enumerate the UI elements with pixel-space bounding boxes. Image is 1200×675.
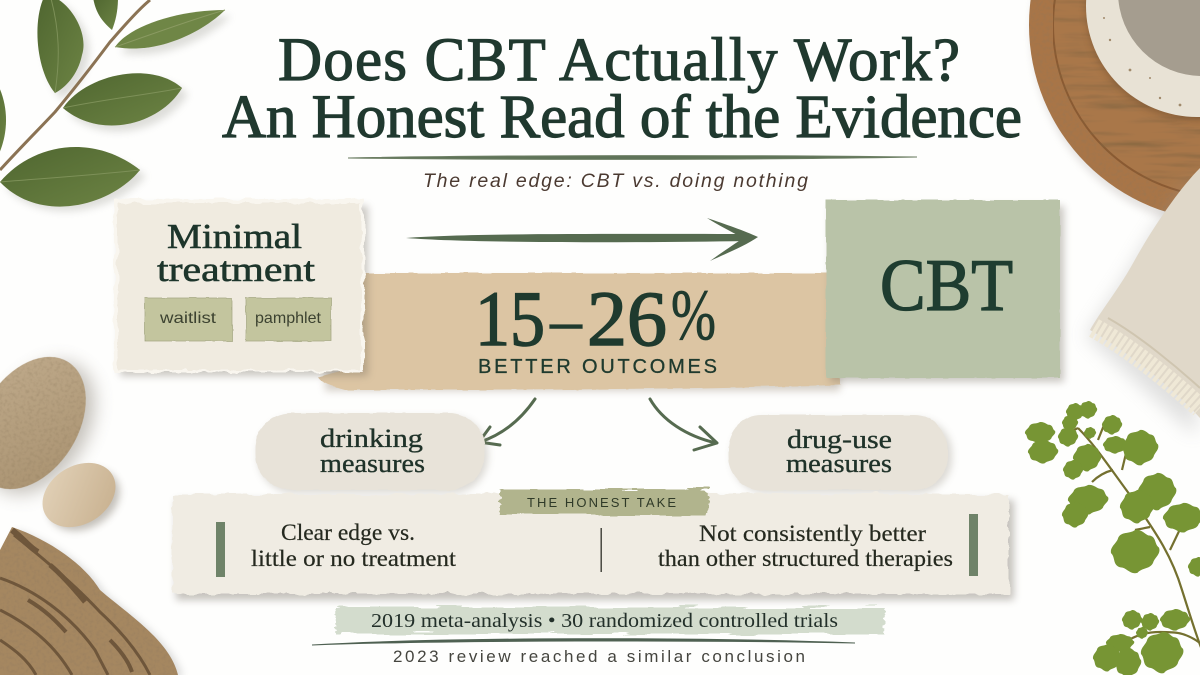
left takeaway: Clear edge vs. xyxy=(281,520,415,545)
panel: the honest take xyxy=(172,489,1014,600)
left takeaway: little or no treatment xyxy=(251,546,457,571)
chip: waitlist xyxy=(145,298,232,341)
card heading: Minimal xyxy=(167,217,302,256)
right accent bar xyxy=(969,514,978,576)
left accent bar xyxy=(216,522,225,577)
left takeaway xyxy=(251,520,457,571)
right takeaway: Not consistently better xyxy=(699,521,926,546)
pill: drug-use measures: measures xyxy=(786,449,892,478)
pill: drug-use measures: drug-use xyxy=(787,425,892,454)
panel: tan result strip xyxy=(318,273,840,391)
big statistic: % xyxy=(671,275,716,355)
right takeaway: than other structured therapies xyxy=(658,546,953,571)
branch with green leaves xyxy=(0,0,231,211)
source underline xyxy=(312,639,855,645)
panel: CBT card: CBT xyxy=(880,245,1013,327)
arrow: minimal treatment to CBT xyxy=(406,218,758,261)
title xyxy=(222,27,1022,151)
follow-up note: 2023 review reached a similar conclusion xyxy=(393,647,805,666)
label: the honest take xyxy=(500,489,708,515)
ceramic cup xyxy=(1086,0,1200,120)
pill: drug-use measures xyxy=(728,415,952,493)
pill: drinking measures xyxy=(255,413,488,493)
right takeaway xyxy=(658,521,953,571)
source band: 2019 meta-analysis • 30 randomized controlled trials xyxy=(371,610,838,632)
fern sprig xyxy=(1025,401,1200,675)
driftwood xyxy=(0,527,183,675)
chip: pamphlet xyxy=(246,298,331,341)
big statistic xyxy=(475,275,717,378)
small stone xyxy=(31,450,131,543)
title underline brush stroke xyxy=(348,156,917,159)
label: the honest take: THE HONEST TAKE xyxy=(527,495,676,510)
big statistic: 15 xyxy=(475,275,545,362)
wooden plate xyxy=(1029,0,1200,229)
arrow: to drinking measures xyxy=(479,399,535,445)
big statistic: BETTER OUTCOMES xyxy=(478,356,717,378)
card heading: treatment xyxy=(157,250,315,289)
divider xyxy=(600,528,602,572)
linen cloth xyxy=(1086,168,1200,436)
big statistic: 26 xyxy=(587,275,667,362)
title: An Honest Read of the Evidence xyxy=(222,84,1022,151)
arrow: to drug-use measures xyxy=(650,399,717,450)
panel: minimal treatment card xyxy=(114,199,368,376)
chip: waitlist: waitlist xyxy=(159,310,217,327)
large stone xyxy=(0,337,117,513)
chip: pamphlet: pamphlet xyxy=(255,310,322,327)
title: Does CBT Actually Work? xyxy=(278,27,960,94)
pill: drinking measures: measures xyxy=(320,449,425,478)
panel: CBT card xyxy=(826,200,1064,382)
subtitle: The real edge: CBT vs. doing nothing xyxy=(423,170,808,192)
big statistic: – xyxy=(549,275,583,362)
card heading xyxy=(157,217,315,289)
source band xyxy=(336,607,884,634)
pill: drinking measures: drinking xyxy=(320,424,423,453)
